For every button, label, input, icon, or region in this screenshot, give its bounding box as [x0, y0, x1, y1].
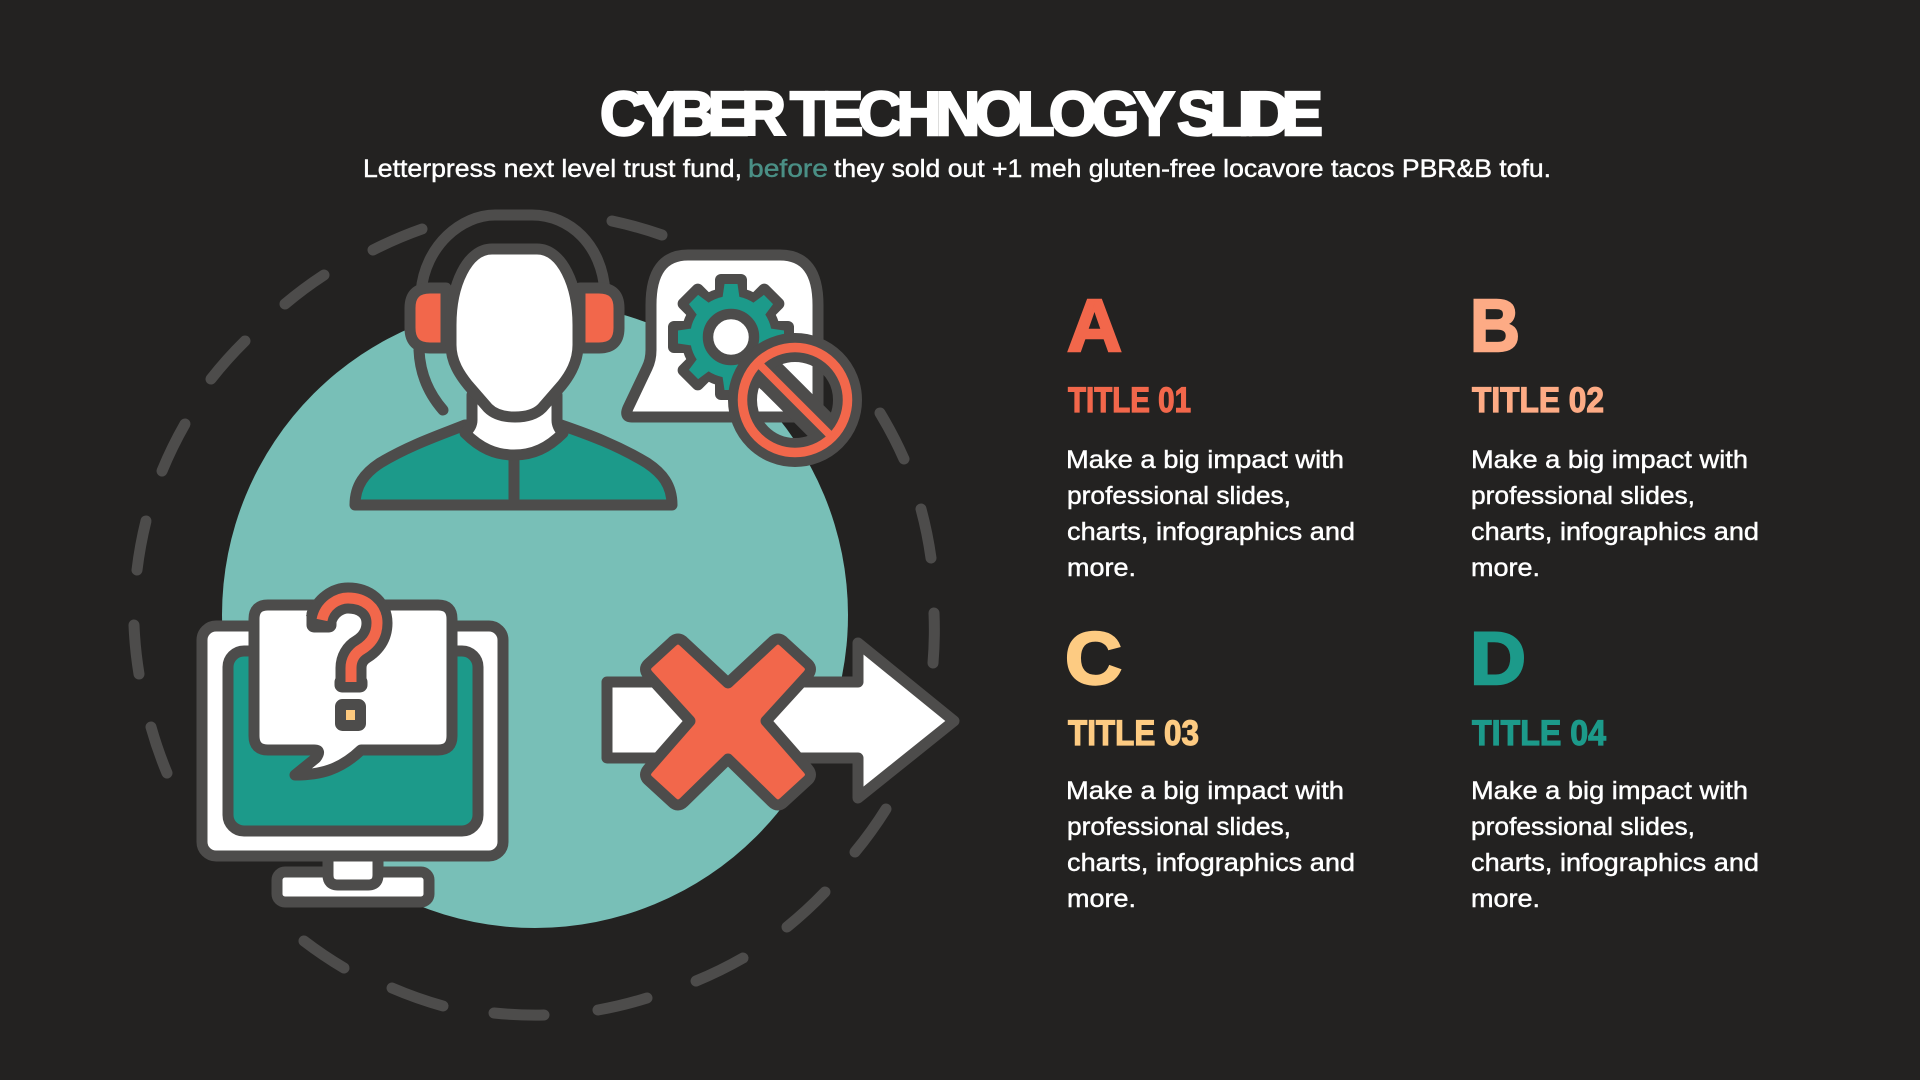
body text — [1471, 777, 1759, 913]
body text: Make a big impact with — [1471, 446, 1748, 474]
letter A: A — [1067, 284, 1122, 367]
body text: more. — [1067, 554, 1136, 582]
body text: charts, infographics and — [1471, 849, 1759, 877]
monitor screen — [228, 651, 478, 831]
icon: blocked arrow — [607, 639, 954, 805]
body text: professional slides, — [1471, 482, 1695, 510]
gear — [668, 274, 794, 400]
body text — [1471, 446, 1759, 582]
title: SLIDE — [1177, 80, 1323, 149]
torso — [355, 425, 672, 505]
subtitle: they sold out +1 meh gluten-free locavore tacos PBR&B tofu. — [834, 155, 1551, 183]
microphone arm — [419, 350, 443, 410]
subtitle — [363, 155, 1551, 183]
body text: Make a big impact with — [1066, 777, 1344, 805]
heading: TITLE 01 — [1068, 381, 1191, 420]
title — [600, 80, 1323, 149]
head — [451, 249, 578, 417]
panel: B — [1470, 284, 1759, 582]
title: TECHNOLOGY — [790, 80, 1175, 149]
letter C: C — [1065, 617, 1122, 700]
body text: Make a big impact with — [1066, 446, 1344, 474]
subtitle: before — [748, 155, 828, 183]
speech bubble — [627, 255, 818, 417]
icon: monitor with question bubble — [202, 598, 503, 902]
right ear cup — [580, 288, 619, 348]
background teal circle — [222, 302, 848, 928]
monitor body — [202, 626, 503, 856]
body text: professional slides, — [1471, 813, 1695, 841]
letter D: D — [1470, 617, 1526, 700]
body text — [1066, 446, 1355, 582]
body text: more. — [1471, 554, 1540, 582]
title: CYBER — [600, 80, 786, 149]
left ear cup — [410, 288, 446, 348]
prohibition sign — [742, 348, 848, 452]
letter B: B — [1470, 284, 1520, 367]
monitor stand neck — [328, 856, 378, 885]
body text: charts, infographics and — [1471, 518, 1759, 546]
shirt centre seam — [508, 455, 520, 505]
body text: professional slides, — [1067, 813, 1291, 841]
body text: more. — [1067, 885, 1136, 913]
monitor stand base — [277, 872, 429, 902]
panel: D — [1470, 617, 1759, 913]
question mark dot — [340, 704, 360, 726]
subtitle: Letterpress next level trust fund, — [363, 155, 742, 183]
body text: charts, infographics and — [1067, 849, 1355, 877]
icon: support person with headset — [355, 215, 672, 505]
body text: professional slides, — [1067, 482, 1291, 510]
neck — [465, 395, 563, 455]
question mark — [312, 598, 377, 687]
body text: Make a big impact with — [1471, 777, 1748, 805]
body text: charts, infographics and — [1067, 518, 1355, 546]
body text — [1066, 777, 1355, 913]
panel: C — [1065, 617, 1355, 913]
speech bubble — [254, 605, 452, 775]
arrow — [607, 643, 954, 798]
body text: more. — [1471, 885, 1540, 913]
heading: TITLE 04 — [1472, 714, 1606, 753]
heading: TITLE 02 — [1472, 381, 1604, 420]
panel: A — [1066, 284, 1355, 582]
headband — [421, 215, 605, 292]
heading: TITLE 03 — [1068, 714, 1199, 753]
dashed ring — [134, 221, 934, 1015]
icon: gear speech bubble with prohibition sign — [627, 255, 848, 452]
red cross — [646, 639, 810, 805]
